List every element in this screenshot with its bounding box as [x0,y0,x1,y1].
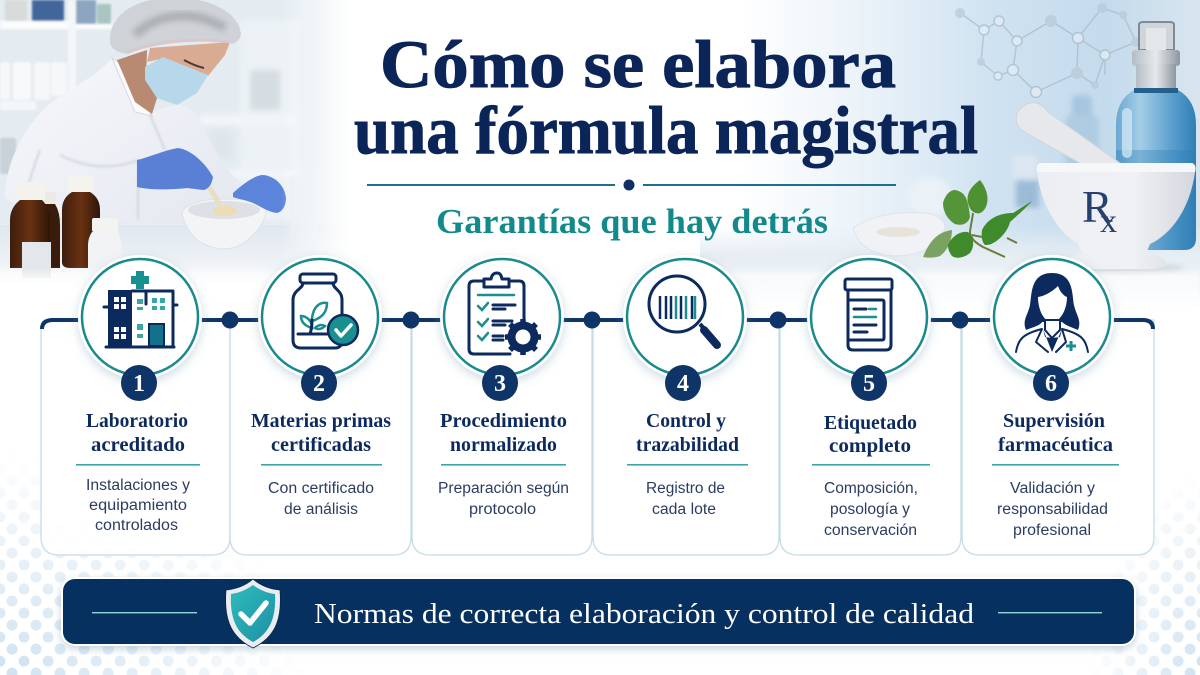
icon: white mortar with Rx: x [1100,203,1117,240]
card description [646,480,725,518]
card description [86,477,190,534]
decoration: shelves and blurred bottles [0,0,112,174]
panel: card 3 background [412,320,592,555]
step 1: laboratorio acreditado [76,255,202,534]
decoration: pestle [1016,103,1120,166]
card title: Materias primas [251,411,391,432]
decoration: glass beaker [290,175,318,245]
card description: Instalaciones y [86,477,190,494]
card title: normalizado [450,435,557,456]
card description: conservación [824,522,917,539]
number badge 6: 6 [1045,371,1057,397]
footer banner [61,577,1136,648]
step 2: materias primas certificadas [251,255,391,518]
icon: building with cross [78,255,202,379]
halftone dots: bottom right [1109,506,1200,675]
icon: labelled container [807,255,931,379]
title: una fórmula magistral [354,92,978,168]
icon: magnifier with barcode [623,255,747,379]
icon: white mortar with Rx: R [1082,181,1113,232]
card title: Procedimiento [440,411,567,432]
card description: cada lote [652,501,716,518]
title: Cómo se elabora [380,26,896,102]
number badge 5: 5 [863,371,875,397]
panel: card 5 background [780,320,961,555]
decoration: closed eye [184,60,204,68]
panel: card 6 background [962,320,1154,555]
background photo: blue laboratory still life, top right [700,0,1200,310]
number badge 5 [851,365,887,401]
card description: responsabilidad [997,501,1108,518]
decoration: right blue glove [233,175,286,213]
number badge 6 [1033,365,1069,401]
decoration: green leaves [923,180,1032,258]
decoration: forehead [147,42,230,76]
decoration: surgical mask [145,57,208,105]
card description: Registro de [646,480,725,497]
panel: card 1 background [41,320,230,555]
number badge 1 [121,365,157,401]
card description: controlados [95,517,178,534]
banner text: Normas de correcta elaboración y control de calidad [314,598,975,630]
card description: Validación y [1010,480,1095,497]
title divider [367,180,896,190]
icon: white mortar with Rx [1037,163,1196,273]
icon: female pharmacist [990,255,1114,379]
panel: card 4 background [593,320,779,555]
card title [440,411,567,456]
card description: Con certificado [268,480,374,497]
card description [824,480,918,539]
decoration: blue glass bottle [1116,22,1196,250]
decoration: white mortar and spatula [182,199,267,249]
panel: card 2 background [230,320,411,555]
card title [86,411,188,456]
number badge 4: 4 [677,371,689,397]
card description: Composición, [824,480,918,497]
icon: jar with plant and check [258,255,382,379]
number badge 3 [482,365,518,401]
card title [998,411,1113,456]
step 3: procedimiento normalizado [438,255,569,518]
card title [636,411,739,456]
card description: protocolo [469,501,536,518]
card title: Supervisión [1003,411,1105,432]
decoration: powder dish [853,213,945,256]
decoration: hair net [110,0,241,54]
decoration: photo fade to white [0,272,1200,306]
connector timeline [42,312,1153,329]
number badge 2: 2 [313,371,325,397]
card description [268,480,374,518]
halftone dots: bottom left [0,488,258,675]
icon: shield with check [226,579,280,648]
card title: trazabilidad [636,435,739,456]
number badge 4 [665,365,701,401]
card title [824,413,917,457]
card title: certificadas [271,435,371,456]
number badge 2 [301,365,337,401]
decoration: amber bottles [10,176,122,278]
decoration: table surface [700,225,1200,310]
number badge 3: 3 [494,371,506,397]
title [354,26,978,168]
decoration: molecule network [955,3,1150,98]
card description: profesional [1013,522,1091,539]
step 6: supervisión farmacéutica [990,255,1119,539]
card description: Preparación según [438,480,569,497]
decoration: neck [117,50,157,114]
card title: Laboratorio [86,411,188,432]
card title: Control y [646,411,726,432]
card title: acreditado [91,435,185,456]
card description: de análisis [284,501,358,518]
subtitle: Garantías que hay detrás [436,202,828,241]
step 4: control y trazabilidad [623,255,748,518]
number badge 1: 1 [133,371,145,397]
card description: equipamiento [89,497,187,514]
panel: six guarantee cards [41,320,1154,555]
background photo: pharmacist in laboratory, top left [0,0,350,287]
step 5: etiquetado completo [807,255,931,539]
card description [997,480,1108,539]
decoration: table [0,225,291,272]
card title: completo [829,436,911,457]
decoration: left blue glove [137,148,213,190]
decoration: lab coat [5,59,234,208]
card title [251,411,391,456]
card description: posología y [830,501,910,518]
card title: farmacéutica [998,435,1113,456]
card title: Etiquetado [824,413,917,434]
card description [438,480,569,518]
icon: clipboard with gear [440,255,564,379]
decoration: blurred background bottles [908,95,1099,217]
